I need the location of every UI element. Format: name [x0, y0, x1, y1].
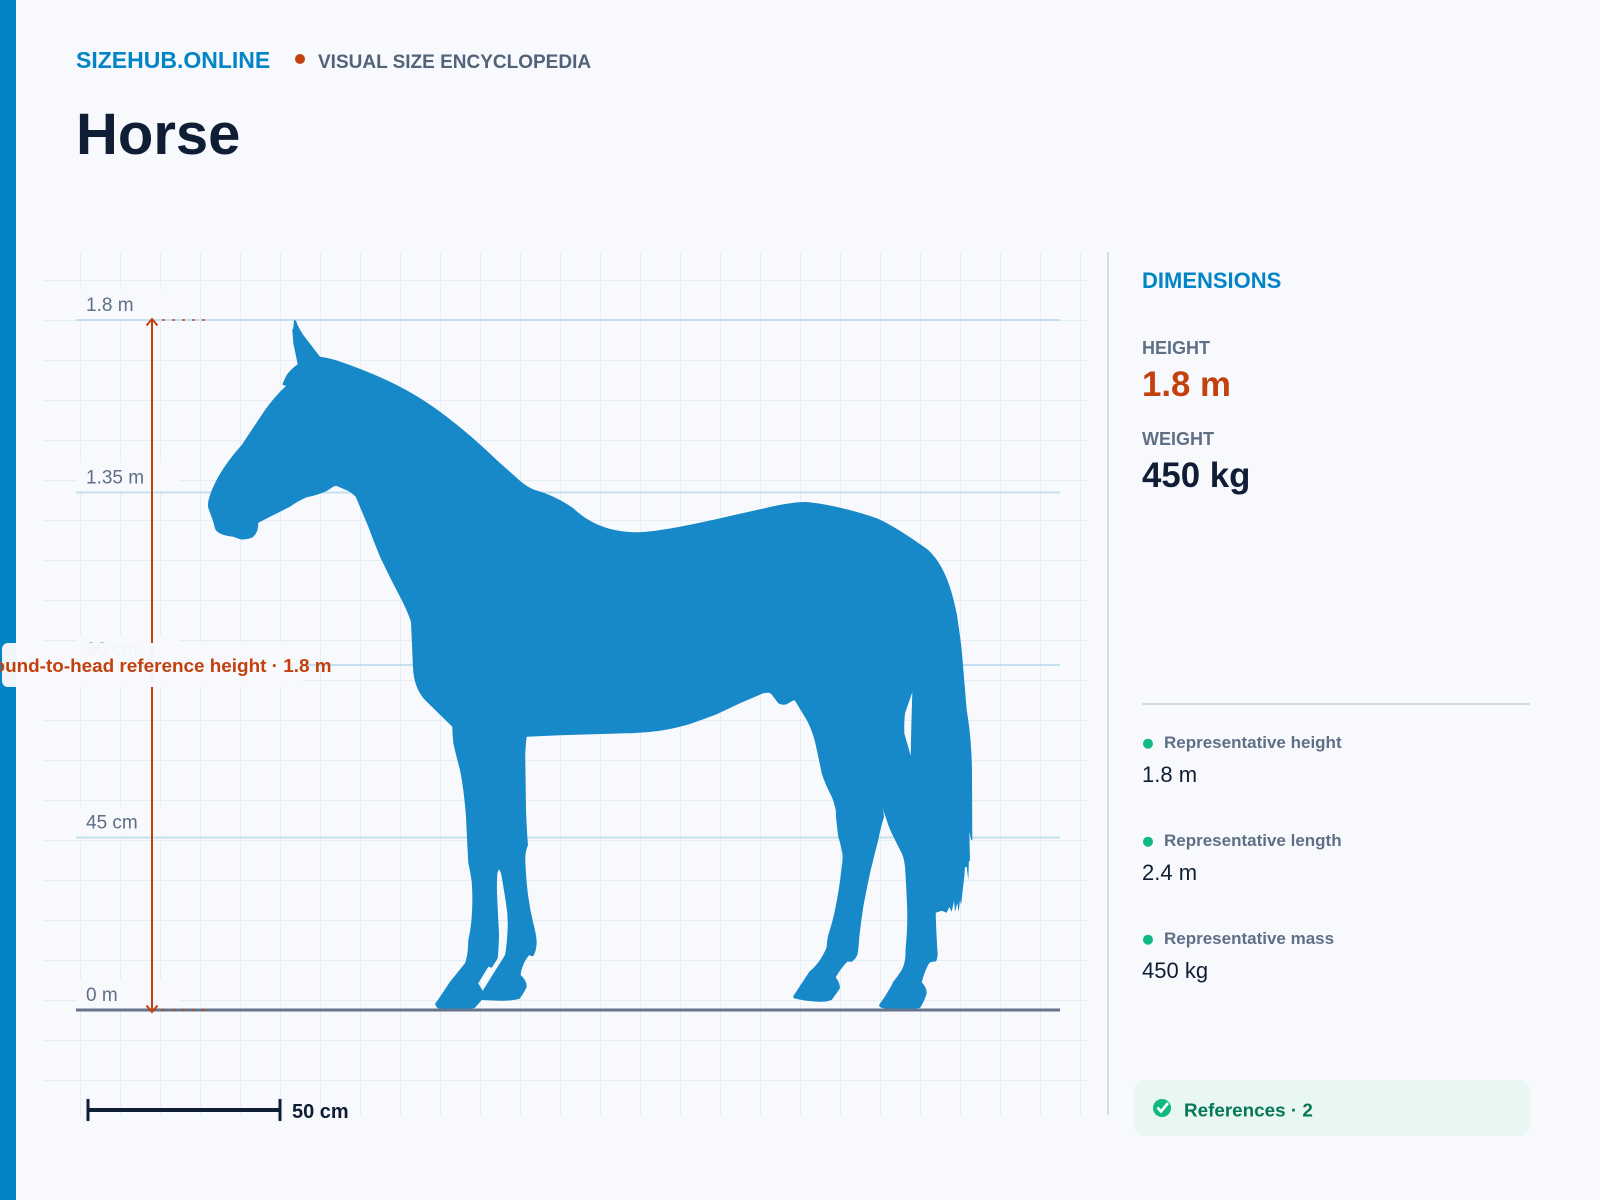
- fact: representative height: Representative height: [1164, 733, 1342, 752]
- fact: representative mass: [1142, 929, 1334, 983]
- stat: weight: [1142, 429, 1250, 495]
- header: brand and tagline: [76, 47, 591, 73]
- scale labels and reference lines: 0 m: [86, 985, 118, 1006]
- height measurement arrow: [146, 319, 205, 1012]
- ground line: [76, 1008, 1060, 1012]
- fact: representative height: [1142, 733, 1342, 787]
- stat: height: [1142, 338, 1231, 404]
- left accent bar: [0, 0, 16, 1200]
- icon: check circle: [1153, 1099, 1171, 1117]
- scale labels and reference lines: 1.8 m: [86, 295, 134, 316]
- fact: representative mass: 450 kg: [1142, 958, 1208, 983]
- stat: height: HEIGHT: [1142, 338, 1210, 358]
- fact: representative length: 2.4 m: [1142, 860, 1197, 885]
- scale labels and reference lines: 90 cm: [86, 640, 138, 661]
- stat: weight: 450 kg: [1142, 456, 1250, 495]
- size chart: horse against height scale: [0, 290, 1060, 1123]
- references badge: References · 2: [1184, 1100, 1313, 1121]
- fact: representative length: Representative length: [1164, 831, 1342, 850]
- fact: representative mass: Representative mass: [1164, 929, 1334, 948]
- header: brand and tagline: VISUAL SIZE ENCYCLOPEDIA: [318, 52, 591, 73]
- stat: weight: WEIGHT: [1142, 429, 1214, 449]
- title: Horse: [76, 102, 240, 167]
- references badge: [1134, 1080, 1530, 1136]
- horse silhouette: [208, 320, 972, 1011]
- header: brand and tagline: SIZEHUB.ONLINE: [76, 47, 270, 73]
- scale bar: 50 cm: 50 cm: [292, 1101, 349, 1123]
- fact: representative length: [1142, 831, 1342, 885]
- scale labels and reference lines: [76, 290, 1060, 1010]
- scale labels and reference lines: 1.35 m: [86, 468, 144, 488]
- scale bar: 50 cm: [88, 1099, 349, 1123]
- fact: representative height: 1.8 m: [1142, 762, 1197, 787]
- scale labels and reference lines: 45 cm: [86, 812, 138, 834]
- panel heading: DIMENSIONS: [1142, 268, 1281, 293]
- height callout label: [0, 643, 332, 687]
- panel: dimensions sidebar: [1108, 252, 1530, 1136]
- stat: height: 1.8 m: [1142, 365, 1231, 404]
